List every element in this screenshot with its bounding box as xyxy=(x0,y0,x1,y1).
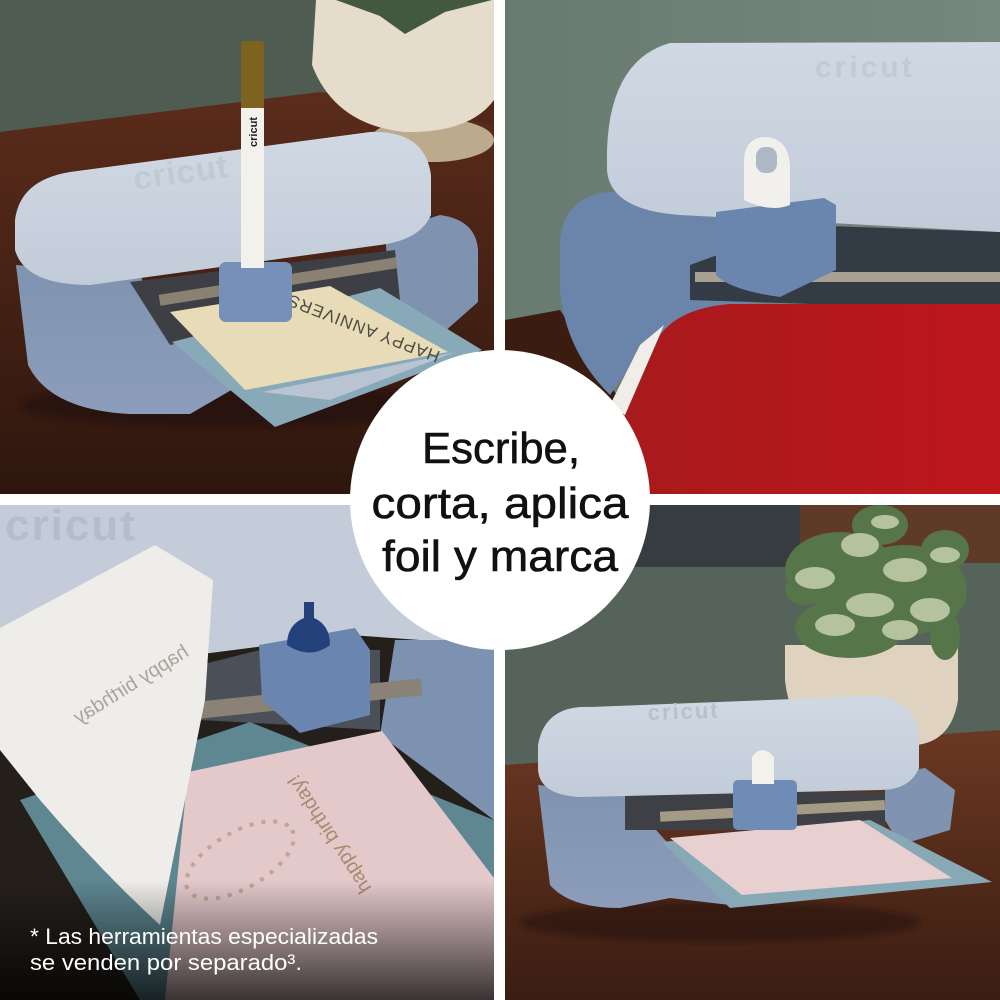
logo on lid: cricut xyxy=(5,501,137,550)
pink card xyxy=(165,731,494,1000)
headline xyxy=(372,424,629,581)
embossed message xyxy=(184,775,372,901)
embossed message: happy birthday! xyxy=(283,771,376,897)
headline: Escribe, xyxy=(422,424,580,473)
panel: pen writing photo xyxy=(0,0,494,494)
handwriting on card: HAPPY ANNIVERS xyxy=(284,290,442,366)
carriage xyxy=(716,198,836,297)
machine lid xyxy=(607,42,1000,232)
icon: pen: cricut xyxy=(248,117,260,147)
headline: corta, aplica xyxy=(372,479,629,528)
footnote text: se venden por separado³. xyxy=(30,950,302,975)
headline: foil y marca xyxy=(382,532,619,581)
icon: blue tool knob xyxy=(287,602,330,652)
icon: white tool cap xyxy=(752,750,774,784)
panel: foil cutting photo xyxy=(505,0,1000,494)
circle callout xyxy=(350,350,650,650)
panel: foil result photo xyxy=(0,501,494,1000)
footnote text: * Las herramientas especializadas xyxy=(30,924,378,949)
carriage xyxy=(259,628,370,733)
machine with pen xyxy=(15,41,482,427)
machine base xyxy=(560,192,760,395)
icon: plant pot xyxy=(312,0,494,162)
footnote text xyxy=(30,924,378,975)
logo on lid: cricut xyxy=(647,698,720,725)
logo on lid: cricut xyxy=(815,51,915,84)
foil sheet: happy birthday xyxy=(70,641,193,729)
cutting mat xyxy=(20,722,494,1000)
icon: potted plant xyxy=(785,505,969,745)
icon: pen xyxy=(241,41,264,268)
icon: white tool cap xyxy=(744,137,790,208)
machine xyxy=(520,696,992,942)
logo on lid: cricut xyxy=(131,147,231,197)
panel: complete machine photo xyxy=(505,505,1000,1000)
foil sheet xyxy=(0,545,213,925)
red foil sheet xyxy=(625,304,1000,494)
